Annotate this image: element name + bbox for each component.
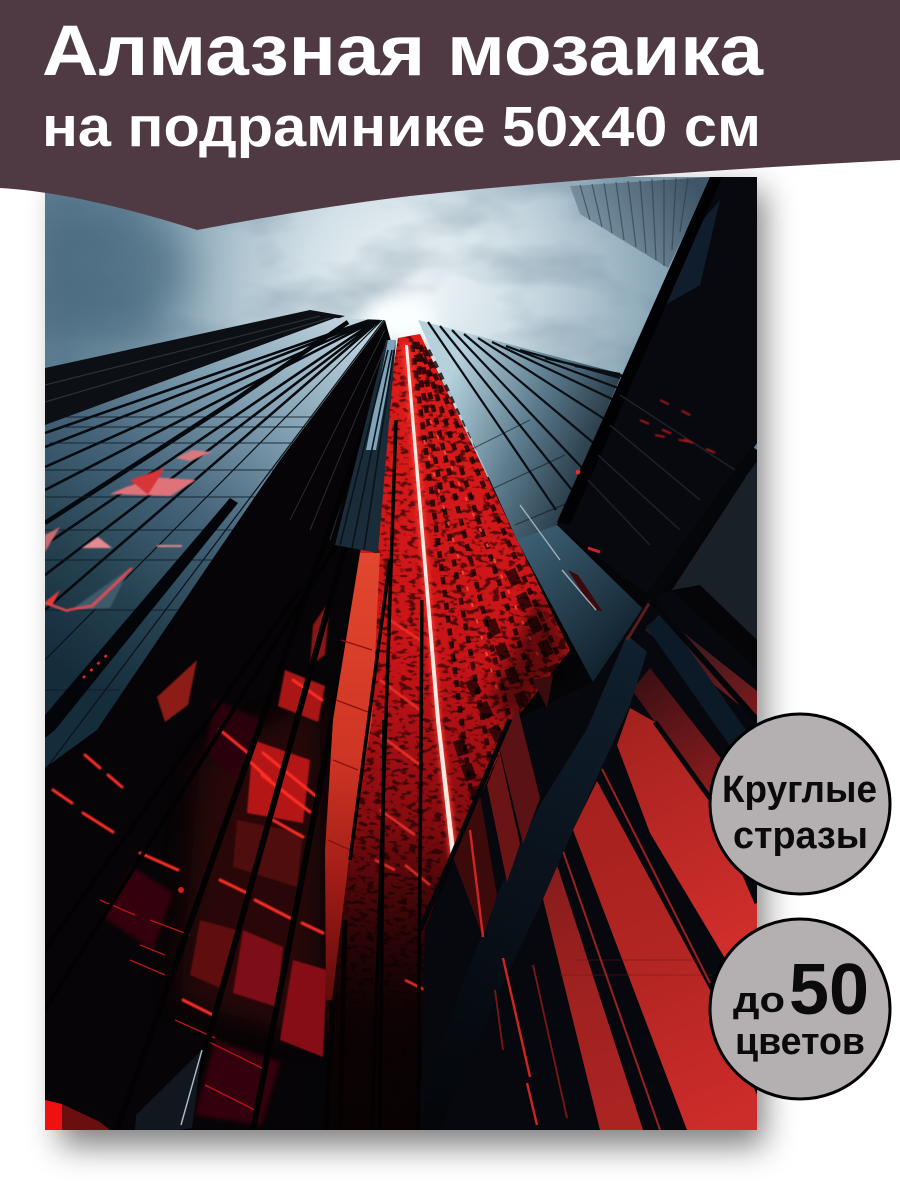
upper dim red panels [632,614,757,805]
subtitle: на подрамнике 50х40 см [42,95,761,159]
central red tower [325,334,570,1034]
badge: round rhinestones: Круглые [722,769,877,811]
dark right tower foreground [557,177,757,597]
glass fan lines [45,320,380,610]
badge: up to 50 colours: до [733,979,785,1020]
header band [0,0,900,230]
badge: round rhinestones: стразы [733,815,868,857]
white light line [403,345,457,860]
distant building top right [570,177,712,268]
red corner block [45,1100,62,1130]
lower right base [424,608,644,992]
diagonal dark beam across left glass [45,498,238,738]
far-left dark building [45,310,345,428]
small red lights [640,400,720,455]
dark column mullions [350,420,422,1130]
column streaks [375,620,430,990]
lower-left dark tower with red windows [45,320,395,1130]
canvas shadow [60,190,764,1146]
navy stripe [655,620,745,748]
speckle texture [320,330,580,1130]
glass tile lines [45,417,340,690]
right glass tower face [418,320,644,682]
badge: up to 50 colours: 50 [789,950,869,1030]
title: Алмазная мозаика [42,12,764,91]
light lines on dark side [290,330,390,540]
blue window at bottom [135,1050,202,1130]
bright red window streaks [53,680,323,1015]
panel: mosaic picture of skyscrapers [30,177,757,1130]
badge: up to 50 colours: цветов [735,1021,865,1063]
red window panels [157,660,197,722]
lower right red glass panels [543,708,757,1130]
pink reflections [45,450,212,612]
sky with clouds [30,177,757,477]
blue strip beside red [335,340,396,553]
black mullions [168,424,366,1128]
beam and dim panels left of it [420,450,757,1130]
badge: round rhinestones [710,714,890,894]
right glass band [672,460,757,640]
badge: up to 50 colours [710,919,890,1099]
red window glow [180,700,320,1040]
left glass tower face [45,318,385,770]
bright vertical light strip [325,553,380,1000]
dotted window texture on red face [412,342,580,800]
